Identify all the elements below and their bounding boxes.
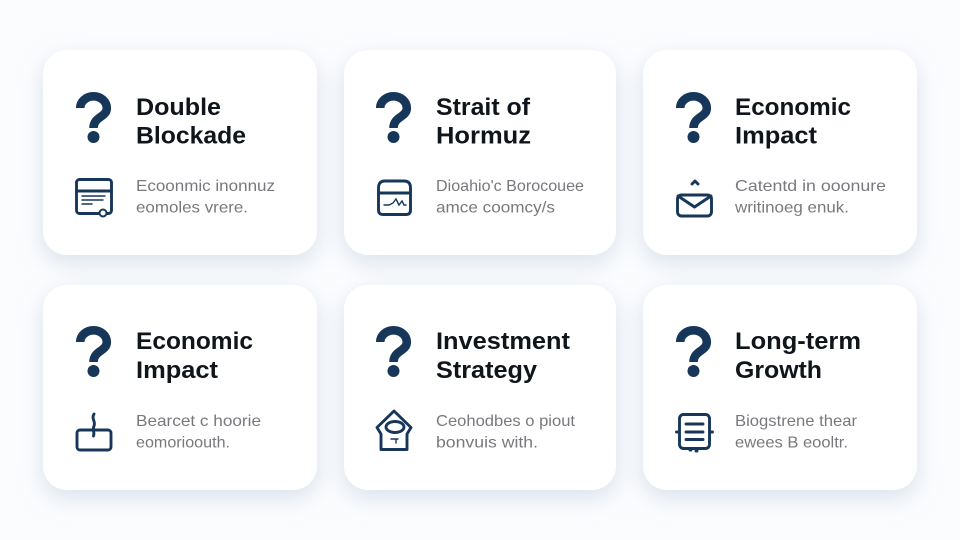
heading: Strait of Hormuz: Strait of	[436, 94, 531, 121]
text: card description: Dioahio'c Borocouee	[436, 178, 584, 195]
icon: question mark	[680, 330, 707, 377]
icon: question mark	[80, 96, 107, 143]
icon: question mark	[680, 96, 707, 143]
panel: Investment Strategy	[344, 285, 616, 490]
heading: Economic Impact: Impact	[136, 357, 218, 384]
text: card description: amce coomcy/s	[436, 200, 555, 216]
icon: list document	[676, 414, 712, 451]
heading: Economic Impact: Economic	[735, 94, 851, 121]
text: card description: ewees B eooltr.	[735, 434, 848, 452]
icon: tray with squiggle	[77, 414, 111, 450]
icon: box with chart line	[378, 181, 410, 214]
panel: Economic Impact (bottom)	[43, 285, 317, 490]
heading: Long-term Growth: Long-term	[735, 328, 861, 355]
icon: envelope with caret	[678, 181, 712, 216]
heading: Double Blockade: Double	[136, 94, 221, 121]
text: card description: eomoles vrere.	[136, 200, 248, 216]
text: card description: writinoeg enuk.	[734, 200, 849, 216]
heading: Economic Impact: Economic	[136, 328, 253, 355]
heading: Economic Impact: Impact	[735, 122, 817, 150]
heading: Double Blockade: Blockade	[136, 122, 246, 150]
icon: document with badge	[76, 180, 112, 216]
panel: Double Blockade	[43, 50, 317, 255]
icon: question mark	[80, 330, 107, 377]
text: card description: Bearcet c hoorie	[136, 413, 261, 430]
text: card description: Catentd in ooonure	[735, 178, 886, 195]
heading: Strait of Hormuz: Hormuz	[436, 122, 531, 150]
icon: question mark	[380, 96, 407, 143]
panel: Strait of Hormuz	[344, 50, 616, 255]
text: card description: eomorioouth.	[136, 434, 230, 452]
panel: Long-term Growth	[643, 285, 917, 490]
text: card description: Ecoonmic inonnuz	[136, 178, 275, 195]
text: card description: Ceohodbes o piout	[436, 413, 576, 430]
text: card description: Biogstrene thear	[735, 413, 858, 430]
icon: house	[377, 411, 411, 450]
heading: Investment Strategy: Strategy	[436, 357, 537, 384]
heading: Investment Strategy: Investment	[436, 328, 570, 355]
icon: question mark	[380, 330, 407, 377]
text: card description: bonvuis with.	[436, 434, 538, 452]
panel: Economic Impact (top)	[643, 50, 917, 255]
heading: Long-term Growth: Growth	[735, 357, 822, 384]
